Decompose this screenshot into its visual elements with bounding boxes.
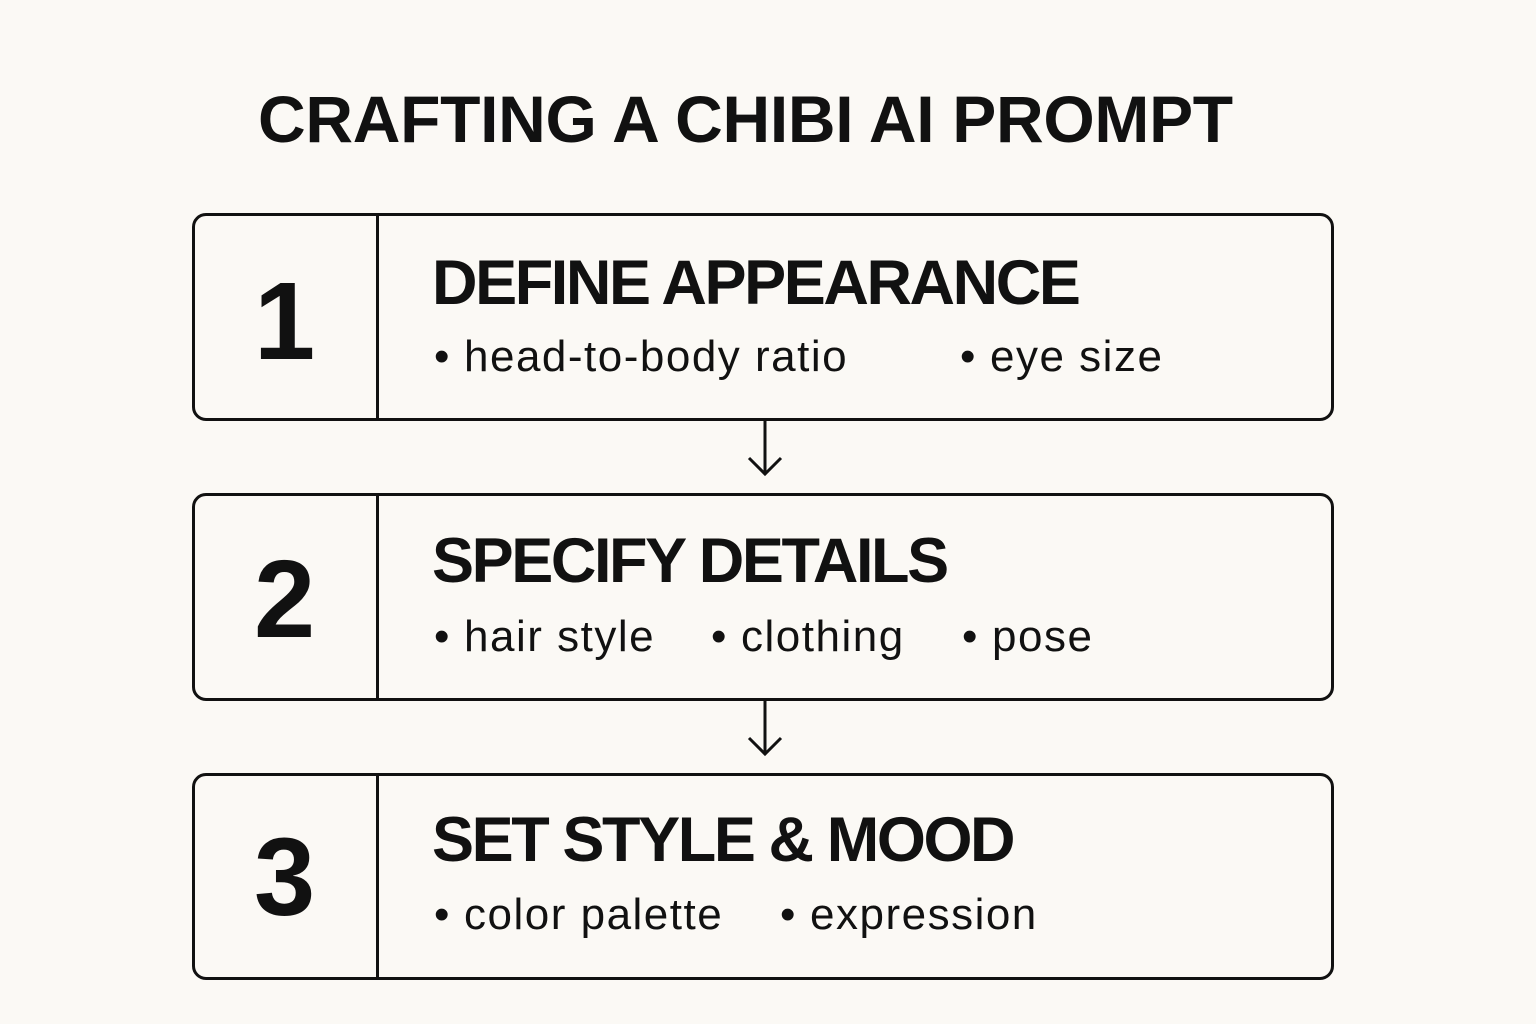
title: CRAFTING A CHIBI AI PROMPT (258, 82, 1233, 156)
bullets step 2: hair style (464, 612, 655, 661)
bullets step 3: expression (810, 890, 1038, 939)
bullets step 1: • (960, 332, 977, 381)
heading: specify details: SPECIFY DETAILS (432, 526, 947, 596)
number 3: 3 (254, 816, 315, 939)
heading: define appearance: DEFINE APPEARANCE (432, 248, 1078, 318)
arrow 1 (748, 421, 782, 476)
bullets step 3 (434, 890, 1038, 939)
bullets step 2: • (434, 612, 451, 661)
bullets step 1: head-to-body ratio (464, 332, 848, 381)
number 1: 1 (254, 260, 315, 383)
number 2: 2 (254, 538, 315, 661)
arrow 2 (748, 701, 782, 756)
bullets step 3: • (780, 890, 797, 939)
bullets step 2: • (711, 612, 728, 661)
panel: step 2 (192, 493, 1334, 701)
bullets step 3: color palette (464, 890, 723, 939)
panel: step 3 (192, 773, 1334, 980)
bullets step 1: • (434, 332, 451, 381)
bullets step 3: • (434, 890, 451, 939)
bullets step 2: • (962, 612, 979, 661)
bullets step 2: pose (992, 612, 1093, 661)
bullets step 1: eye size (990, 332, 1163, 381)
bullets step 2 (434, 612, 1093, 661)
heading: set style & mood: SET STYLE & MOOD (432, 805, 1013, 875)
bullets step 1 (434, 332, 1163, 381)
bullets step 2: clothing (741, 612, 905, 661)
panel: step 1 (192, 213, 1334, 421)
